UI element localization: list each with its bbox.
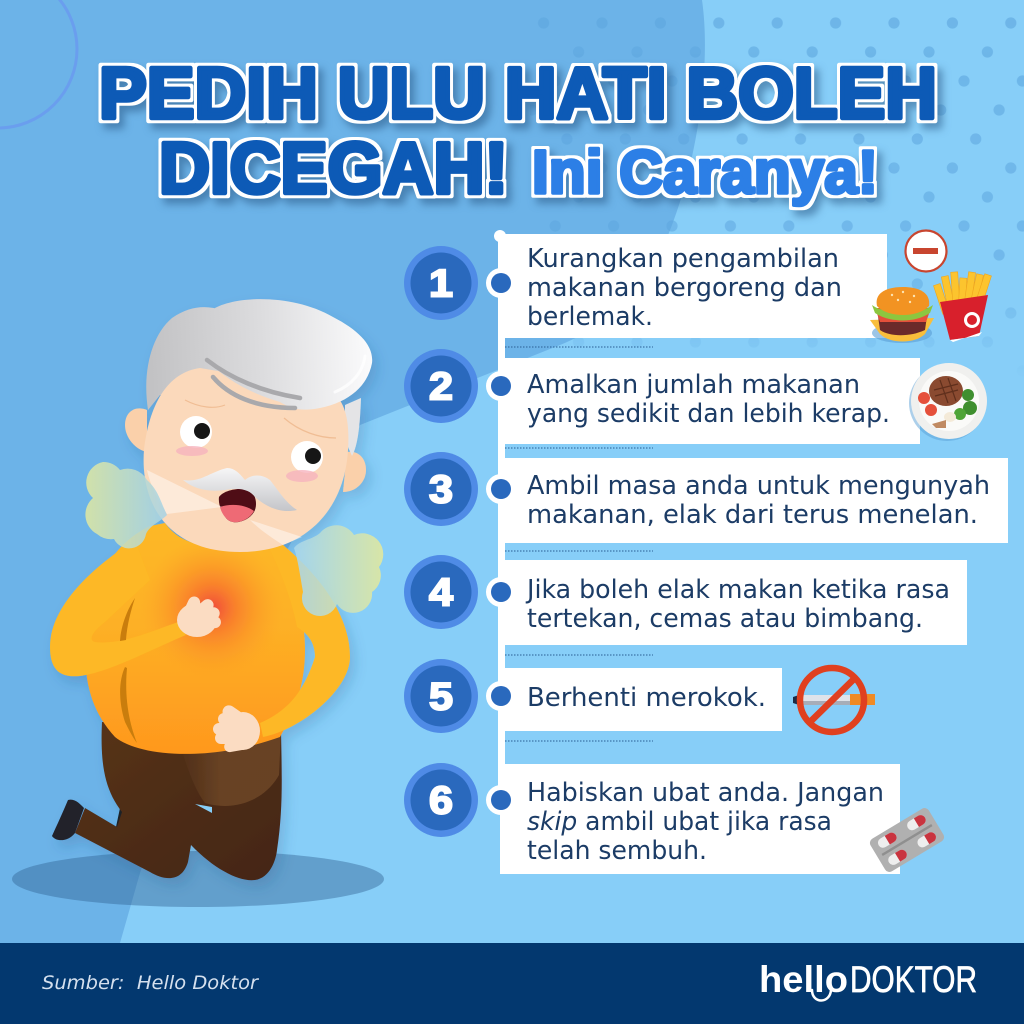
text box 2 — [500, 358, 920, 444]
icon: no fried food — [870, 230, 991, 343]
connector 3 — [486, 474, 516, 504]
mouth — [219, 489, 256, 522]
connector 2 — [486, 371, 516, 401]
title — [99, 54, 937, 209]
trousers — [75, 722, 282, 880]
number badge 6: 6 — [429, 780, 453, 822]
text 3: Ambil masa anda untuk mengunyah — [527, 471, 990, 501]
text box 5 — [500, 668, 782, 731]
icon: pill blister — [868, 806, 946, 874]
eyes — [180, 416, 212, 448]
fries — [934, 272, 991, 342]
step 5 — [404, 659, 782, 733]
connector 4 — [486, 577, 516, 607]
divider 4 — [505, 654, 653, 656]
text 1: Kurangkan pengambilan — [527, 244, 839, 274]
wrinkles — [185, 400, 336, 438]
text box 4 — [500, 560, 967, 645]
shirt fold marks — [120, 598, 137, 743]
connector 5 — [486, 681, 516, 711]
blush — [176, 446, 208, 456]
moustache — [183, 468, 297, 511]
logo — [759, 959, 977, 1000]
back hair — [146, 307, 240, 410]
trouser highlight — [180, 730, 281, 806]
icon: no smoking — [793, 668, 875, 732]
number badge 5: 5 — [429, 676, 453, 718]
trouser gap — [195, 804, 212, 813]
front shoe — [52, 800, 84, 840]
right arm — [260, 536, 350, 737]
connector 1 — [486, 268, 516, 298]
back shoe — [116, 808, 130, 830]
step 3 — [404, 452, 1008, 543]
text 5: Berhenti merokok. — [527, 683, 766, 713]
text 6: telah sembuh. — [527, 836, 707, 866]
breath puff right — [250, 520, 383, 616]
text box 3 — [500, 458, 1008, 543]
divider 2 — [505, 447, 653, 449]
text 1: berlemak. — [527, 302, 653, 332]
step 2 — [404, 349, 920, 444]
divider 1 — [505, 346, 653, 348]
illustration: old man with heartburn — [12, 299, 384, 907]
title: Ini Caranya! — [532, 138, 878, 206]
number badge 2: 2 — [429, 366, 453, 408]
timeline line — [498, 236, 505, 806]
tongue — [220, 505, 254, 522]
number badge 6 — [404, 763, 478, 837]
footer — [0, 943, 1024, 1024]
title: DICEGAH! — [159, 129, 508, 209]
text 2: yang sedikit dan lebih kerap. — [527, 399, 890, 429]
number badge 1: 1 — [429, 262, 453, 306]
number badge 3: 3 — [429, 468, 453, 512]
logo: DOKTOR — [850, 959, 977, 1000]
text 1 — [527, 244, 842, 332]
number badge 4: 4 — [429, 572, 453, 614]
left arm — [50, 540, 186, 676]
step 4 — [404, 555, 967, 645]
text 6: skip ambil ubat jika rasa — [527, 807, 832, 837]
title: PEDIH ULU HATI BOLEH — [99, 54, 937, 134]
face — [144, 368, 348, 552]
text 4 — [525, 575, 950, 634]
ground shadow — [12, 851, 384, 907]
hair top — [207, 299, 372, 410]
heartburn glow — [140, 536, 284, 680]
number badge 3 — [404, 452, 478, 526]
text 3 — [527, 471, 990, 530]
man figure — [50, 299, 372, 880]
text 4: tertekan, cemas atau bimbang. — [527, 604, 923, 634]
text 2 — [527, 370, 890, 429]
breath puff left — [85, 462, 222, 548]
upper hand — [177, 594, 222, 637]
text 6: Habiskan ubat anda. Jangan — [527, 778, 884, 808]
step 1 — [404, 234, 887, 338]
text box 6 — [500, 764, 900, 874]
hair strand — [207, 360, 300, 408]
number badge 4 — [404, 555, 478, 629]
number badge 5 — [404, 659, 478, 733]
logo: hello — [759, 959, 848, 1000]
number badge 2 — [404, 349, 478, 423]
connector 6 — [486, 785, 516, 815]
text 4: Jika boleh elak makan ketika rasa — [525, 575, 950, 605]
text box 1 — [500, 234, 887, 338]
divider 5 — [505, 740, 653, 742]
text 2: Amalkan jumlah makanan — [527, 370, 860, 400]
number badge 1 — [404, 246, 478, 320]
burger — [870, 287, 934, 343]
text 3: makanan, elak dari terus menelan. — [527, 500, 978, 530]
text 1: makanan bergoreng dan — [527, 273, 842, 303]
ears — [125, 408, 147, 452]
step 6 — [404, 763, 900, 874]
divider 3 — [505, 550, 653, 552]
text 6 — [527, 778, 884, 866]
torso — [85, 523, 305, 754]
icon: small meal plate — [909, 363, 987, 441]
source credit: Sumber: Hello Doktor — [42, 972, 259, 994]
lower hand — [213, 703, 260, 753]
